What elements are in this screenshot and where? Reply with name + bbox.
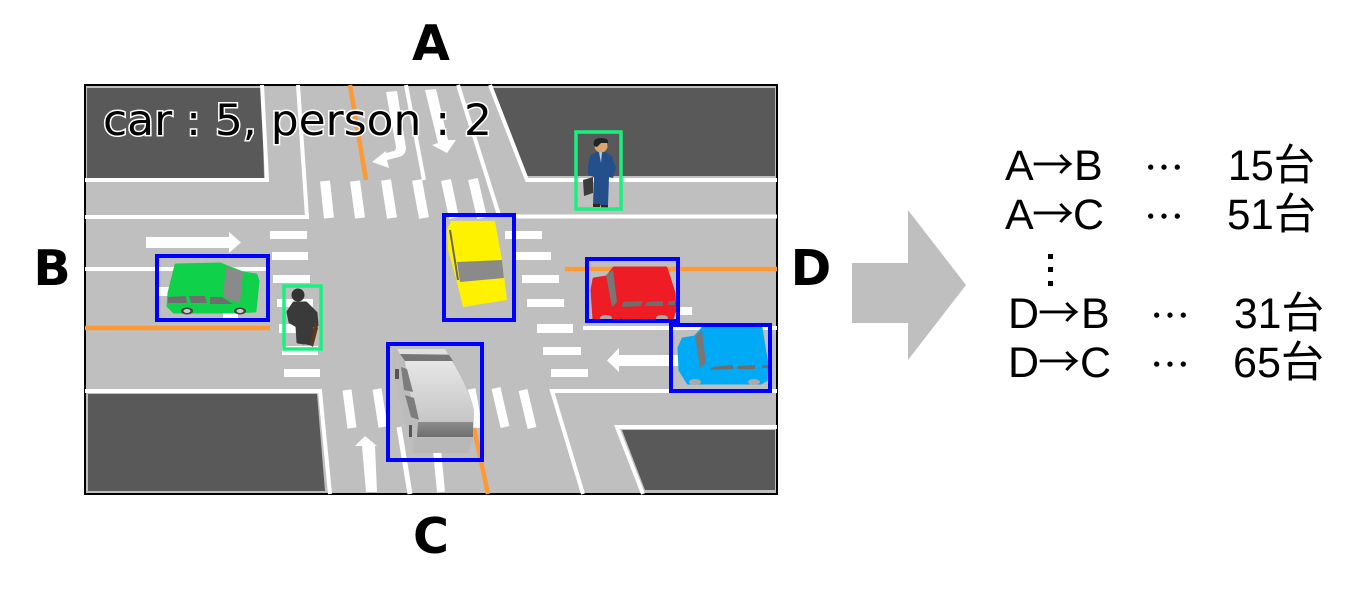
row: A to C: A xyxy=(1005,191,1034,239)
person: dark figure xyxy=(288,288,318,347)
row: D to C: 65台 xyxy=(1233,339,1324,387)
detection box: yellow car xyxy=(444,215,514,320)
row: D to B: → xyxy=(1038,280,1080,341)
arrow: left turn lane xyxy=(372,91,406,168)
sidewalk block: top left xyxy=(87,88,264,178)
sidewalk block: bottom left xyxy=(88,394,325,491)
orange stop line: bottom xyxy=(474,428,488,494)
row: D to C: → xyxy=(1038,329,1080,390)
crosswalk: right xyxy=(505,231,692,377)
row: A to C: ⋯ xyxy=(1144,185,1184,243)
car: red xyxy=(592,268,675,321)
row: A to C: C xyxy=(1073,191,1104,239)
arrow: result flow xyxy=(852,210,966,360)
row: D to B: D xyxy=(1008,290,1039,338)
orange stop line: left xyxy=(85,326,270,330)
arrow: southbound lane xyxy=(425,89,456,153)
direction label D: D xyxy=(791,240,831,297)
detection box: green car xyxy=(157,256,268,320)
arrow: eastbound lane xyxy=(146,232,241,253)
row: A to C xyxy=(1005,181,1316,243)
row: D to B: 31台 xyxy=(1234,290,1324,338)
row: D to C xyxy=(1008,329,1324,391)
arrow: northbound lane xyxy=(355,436,377,492)
row: A to B xyxy=(1005,132,1315,194)
row: A to B: → xyxy=(1032,132,1074,193)
orange stop line: right xyxy=(565,267,777,271)
car: green xyxy=(157,264,267,318)
car: yellow xyxy=(447,221,507,307)
detection box: red car xyxy=(587,259,678,321)
results list xyxy=(1005,132,1324,391)
car: white xyxy=(393,348,474,453)
row: D to C: D xyxy=(1008,339,1039,387)
sidewalk block: top right xyxy=(492,88,775,176)
car: blue xyxy=(679,328,768,385)
row: D to B: B xyxy=(1081,290,1110,338)
detection box: blue car xyxy=(671,325,770,391)
row: A to C: → xyxy=(1032,181,1074,242)
direction label A: A xyxy=(412,15,450,72)
sidewalk block: bottom right xyxy=(622,430,775,490)
ellipsis: more rows xyxy=(1048,254,1053,286)
person: businessman xyxy=(583,138,616,208)
row: A to B: A xyxy=(1005,142,1034,190)
row: D to C: C xyxy=(1080,339,1111,387)
crosswalk: bottom xyxy=(347,388,532,428)
row: D to C: ⋯ xyxy=(1150,333,1190,391)
crosswalk: left xyxy=(270,231,320,377)
detection box: white car xyxy=(388,344,482,460)
detection box: dark figure xyxy=(284,286,321,349)
row: A to B: B xyxy=(1074,142,1103,190)
direction label C: C xyxy=(413,508,449,565)
arrow: westbound lane xyxy=(607,348,680,372)
direction label B: B xyxy=(33,240,71,297)
row: A to B: 15台 xyxy=(1228,142,1315,190)
road markings xyxy=(85,85,777,494)
detection count overlay: car : 5, person : 2 xyxy=(103,96,492,146)
detection box: businessman xyxy=(576,132,621,209)
panel: intersection scene xyxy=(85,85,777,494)
row: D to B xyxy=(1008,280,1324,342)
row: A to C: 51台 xyxy=(1227,191,1316,239)
row: A to B: ⋯ xyxy=(1144,136,1184,194)
row: D to B: ⋯ xyxy=(1150,284,1190,342)
orange stop line: top xyxy=(350,85,366,180)
crosswalk: top xyxy=(325,179,482,218)
